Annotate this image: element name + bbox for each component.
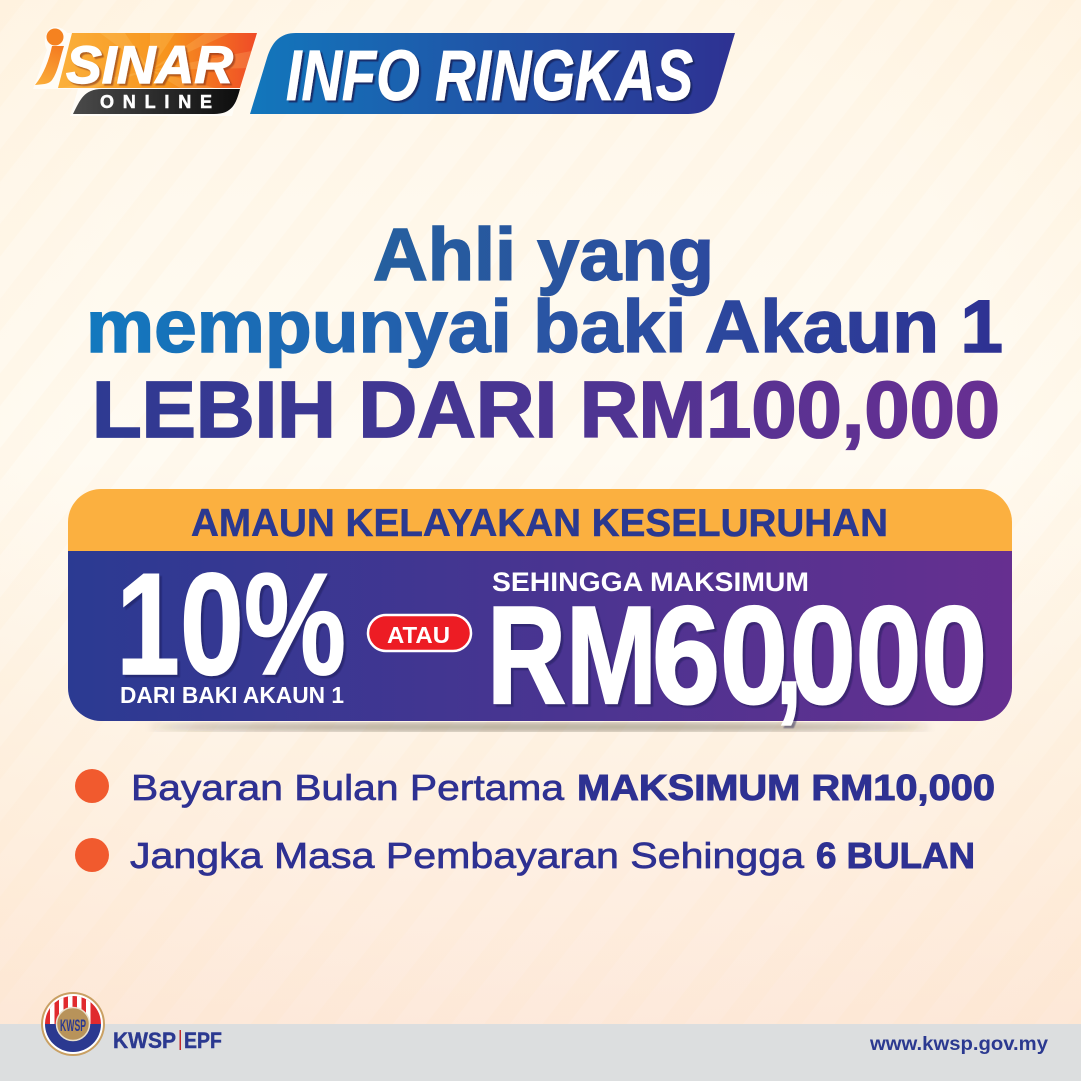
panel header: AMAUN KELAYAKAN KESELURUHAN (191, 502, 888, 545)
RM60,000 figure: , (776, 578, 802, 733)
icon: KWSP crest (41, 992, 105, 1056)
website url: www.kwsp.gov.my (869, 1034, 1048, 1055)
bullet 2: Jangka Masa Pembayaran Sehingga (130, 835, 805, 876)
main heading (86, 213, 1003, 454)
RM60,000 figure: 60 (652, 578, 788, 733)
10 percent figure: 10% (116, 543, 346, 705)
bullet 2 (75, 835, 975, 876)
black ONLINE tab: ONLINE (100, 92, 212, 112)
SINAR wordmark: SINAR (66, 36, 233, 95)
brand: KWSP EPF: EPF (184, 1028, 222, 1053)
ATAU pill (368, 615, 471, 651)
panel: eligibility amount (68, 489, 1012, 733)
icon: KWSP crest: KWSP (60, 1016, 86, 1035)
RM60,000 figure (487, 567, 987, 733)
bullet 1 (75, 767, 995, 808)
black ONLINE tab (73, 89, 240, 114)
main heading: Ahli yang (373, 213, 714, 296)
RM60,000 figure: RM (487, 578, 657, 733)
bullet 1: MAKSIMUM RM10,000 (577, 767, 995, 808)
ATAU pill: ATAU (387, 622, 450, 648)
bullet 2: 6 BULAN (816, 835, 975, 876)
brand: KWSP EPF: KWSP (113, 1028, 176, 1053)
main heading: LEBIH DARI RM100,000 (92, 365, 1000, 454)
logo outline halo (33, 27, 257, 116)
logo: iSinar Online (33, 27, 257, 116)
bullet 1: Bayaran Bulan Pertama (131, 767, 565, 808)
panel body (68, 551, 1012, 721)
panel header (68, 489, 1012, 551)
ribbon: Info Ringkas: INFO RINGKAS (286, 37, 693, 116)
RM60,000 figure: 000 (790, 578, 987, 733)
footer bar (0, 1024, 1081, 1081)
RM60,000 figure: SEHINGGA MAKSIMUM (492, 567, 809, 597)
letter i (35, 28, 64, 85)
brand: KWSP EPF (113, 1028, 222, 1053)
10 percent figure: DARI BAKI AKAUN 1 (120, 682, 344, 708)
main heading: mempunyai baki Akaun 1 (86, 285, 1003, 368)
orange banner (58, 33, 257, 88)
